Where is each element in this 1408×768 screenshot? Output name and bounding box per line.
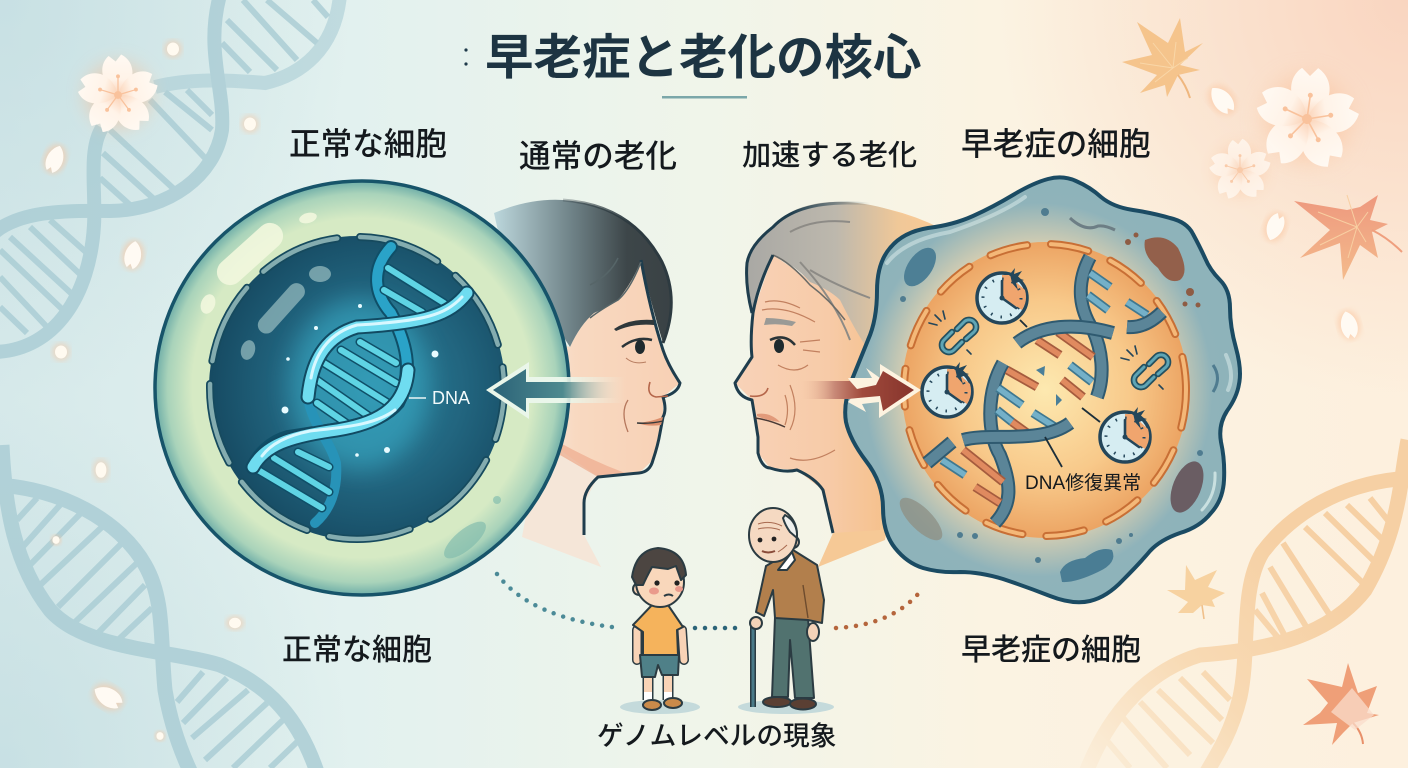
icon: cherry blossom large top right: [1244, 60, 1369, 180]
face outline: [735, 255, 833, 533]
icon: maple leaf orange: [1122, 18, 1203, 98]
nose and mouth lines: [649, 382, 668, 397]
glowing particles: [282, 304, 438, 457]
cell highlights: [198, 211, 318, 316]
eye: [622, 339, 652, 347]
icon: maple leaf bottom: [1303, 663, 1379, 745]
label: DNA: DNA: [432, 388, 470, 408]
organelles: [893, 208, 1218, 582]
decoration: DNA helix bottom left: [0, 445, 318, 768]
left face: normal aging profile: [494, 200, 680, 567]
nucleus: [902, 242, 1188, 538]
wrinkles and eyebrow: [764, 318, 796, 326]
icon: falling petals right: [1202, 80, 1364, 342]
title: 早老症と老化の核心: [485, 31, 922, 85]
dotted connector: normal cell to child: [497, 574, 620, 628]
grey hair: [747, 202, 925, 345]
label: genome-level phenomenon: ゲノムレベルの現象: [597, 721, 836, 751]
nuclear envelope: [904, 244, 1186, 536]
icon: cracked clocks: [922, 268, 1150, 462]
DNA glow: [290, 300, 430, 470]
label: accelerated aging: 加速する老化: [742, 139, 917, 172]
figure: child with progeria: [620, 548, 700, 714]
label: progeria cell bottom: 早老症の細胞: [961, 634, 1141, 667]
arrow: accelerated aging into cell: [800, 364, 921, 418]
panel: progeria cell: [845, 177, 1240, 602]
label: progeria cell top: 早老症の細胞: [961, 126, 1151, 162]
hair: [494, 200, 671, 347]
cell membrane highlights: [887, 197, 1231, 390]
icon: maple leaf red: [1294, 173, 1402, 280]
dotted connector: elder to progeria cell: [836, 588, 923, 628]
nucleus: [209, 236, 505, 540]
nuclear envelope: [210, 237, 504, 539]
face outline: [584, 260, 680, 535]
icon: cherry blossom top left: [75, 54, 161, 137]
face skin: [735, 255, 890, 533]
dotted connector: child to elder: [695, 626, 737, 630]
icon: falling petals left: [40, 40, 259, 741]
mouth and nose: [755, 418, 785, 427]
label: normal cell bottom: 正常な細胞: [282, 634, 432, 667]
neck: [522, 440, 601, 567]
decoration: DNA helix top left: [0, 0, 340, 352]
eye: [770, 337, 795, 345]
label: DNA repair abnormality: DNA修復異常: [1025, 472, 1141, 494]
label: normal aging: 通常の老化: [519, 138, 677, 174]
icon: cherry blossom small top right: [1207, 139, 1273, 202]
healthy DNA helix: [253, 247, 467, 523]
label: normal cell top: 正常な細胞: [289, 126, 447, 162]
face skin: [540, 260, 680, 477]
nucleus highlights: [239, 266, 331, 361]
panel: normal cell: [155, 181, 569, 595]
icon: maple leaf small: [1167, 565, 1225, 619]
broken DNA: [927, 257, 1162, 523]
figure: elderly man with cane: [738, 508, 834, 714]
icon: broken chains: [929, 311, 1168, 389]
decoration: DNA helix bottom right: [1085, 440, 1408, 768]
label: DNA: [409, 388, 470, 408]
arrow: normal aging into cell: [486, 362, 625, 419]
title underline: [662, 96, 747, 98]
right face: accelerated aging profile: [735, 202, 940, 567]
head backdrop: [797, 202, 940, 567]
eyebrow: [614, 320, 654, 331]
